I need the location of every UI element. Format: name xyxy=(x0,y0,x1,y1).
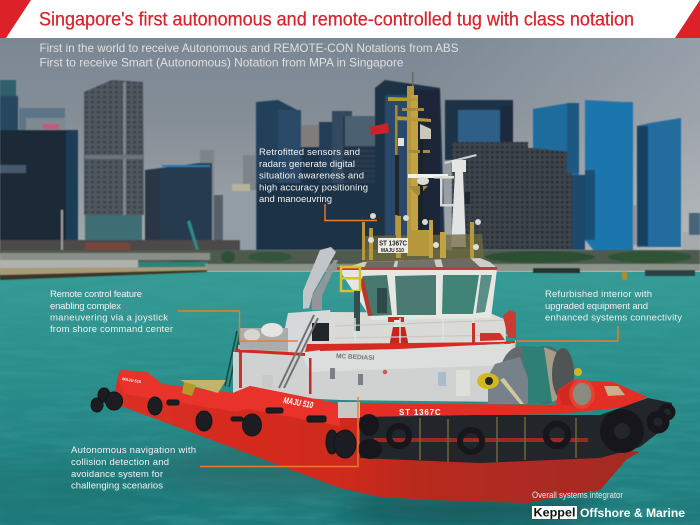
side tyres xyxy=(91,388,356,458)
callout: sensors and radars: situation awareness and xyxy=(259,170,364,182)
yellow mast xyxy=(388,72,448,246)
red flag xyxy=(370,123,389,135)
sensor platform and nameplate: MAJU 510 xyxy=(381,248,404,254)
logo: Keppel wordmark: Keppel xyxy=(534,506,576,520)
towing winch xyxy=(477,346,582,404)
leader line: refurbished interior xyxy=(517,326,618,341)
callout: remote control xyxy=(50,289,173,335)
callout: remote control: enabling complex xyxy=(50,301,121,312)
tugboat illustration xyxy=(91,72,673,503)
stern ladder xyxy=(279,315,318,388)
subtitle text: First to receive Smart (Autonomous) Notation from MPA in Singapore xyxy=(40,56,404,70)
callout: autonomous navigation: collision detection and xyxy=(71,457,169,468)
shoreline trees, sea wall and pier xyxy=(0,250,700,280)
callout: autonomous navigation xyxy=(71,445,196,492)
banner background xyxy=(0,0,700,38)
stern rail gear xyxy=(240,323,288,350)
wheelhouse xyxy=(337,258,497,320)
red corner right xyxy=(675,0,700,38)
callout: sensors and radars: high accuracy positioning xyxy=(259,182,368,194)
logo: Keppel box xyxy=(532,506,577,519)
white radar mast xyxy=(434,154,477,247)
city skyline xyxy=(0,80,700,260)
fender belt xyxy=(360,398,672,463)
red hull: MAJU 510 xyxy=(283,395,314,410)
callout: refurbished interior xyxy=(545,289,682,324)
callout: autonomous navigation: Autonomous navigation with xyxy=(71,445,196,456)
sensor platform and nameplate: ST 1367C xyxy=(379,240,407,248)
hull reflection on water xyxy=(0,442,600,525)
callout: autonomous navigation: challenging scenarios xyxy=(71,480,163,492)
deck railing and red cone xyxy=(236,310,516,356)
credit: overall systems integrator xyxy=(532,490,685,520)
exhaust stack xyxy=(303,247,338,310)
header banner xyxy=(0,0,700,38)
red corner left xyxy=(0,0,31,38)
stern rail posts xyxy=(225,331,240,387)
callout: autonomous navigation: avoidance system for xyxy=(71,469,163,480)
credit: overall systems integrator: Overall systems integrator xyxy=(532,490,623,501)
stern superstructure panel xyxy=(280,310,337,352)
white superstructure xyxy=(233,340,516,402)
subtitle text: First in the world to receive Autonomous and REMOTE-CON Notations from ABS xyxy=(40,41,458,55)
yellow access ladder xyxy=(341,267,360,331)
harbour water xyxy=(0,272,700,525)
callout: sensors and radars: and manoeuvring xyxy=(259,194,332,205)
leader line: autonomous navigation xyxy=(200,397,358,466)
logo: Offshore and Marine: Offshore & Marine xyxy=(580,506,685,520)
callout: sensors and radars: radars generate digital xyxy=(259,159,355,170)
callout: refurbished interior: Refurbished interior with xyxy=(545,289,652,300)
callout: remote control: maneuvering via a joystick xyxy=(50,312,168,324)
bow deck: ST 1367C xyxy=(399,408,441,417)
callout: refurbished interior: enhanced systems connectivity xyxy=(545,312,682,324)
title: Singapore's first autonomous and remote-controlled tug with class notation xyxy=(39,10,634,30)
red hull: MAJU 510 xyxy=(122,376,142,384)
callout: sensors and radars: Retrofitted sensors and xyxy=(259,147,360,158)
white superstructure: MC BEDIASI xyxy=(336,353,375,362)
subtitle text xyxy=(40,41,458,70)
upper deck house xyxy=(330,312,506,348)
callout: remote control: Remote control feature xyxy=(50,289,142,300)
leader line: sensors xyxy=(325,204,377,220)
callout: remote control: from shore command center xyxy=(50,324,173,335)
red hull xyxy=(113,370,640,503)
callout: sensors and radars xyxy=(259,147,368,205)
sky xyxy=(0,38,700,273)
bow deck xyxy=(360,380,647,418)
callout: refurbished interior: upgraded equipment and xyxy=(545,301,648,312)
bow tyres xyxy=(359,406,673,458)
sensor platform and nameplate xyxy=(362,213,484,262)
leader line: remote control xyxy=(178,311,298,341)
